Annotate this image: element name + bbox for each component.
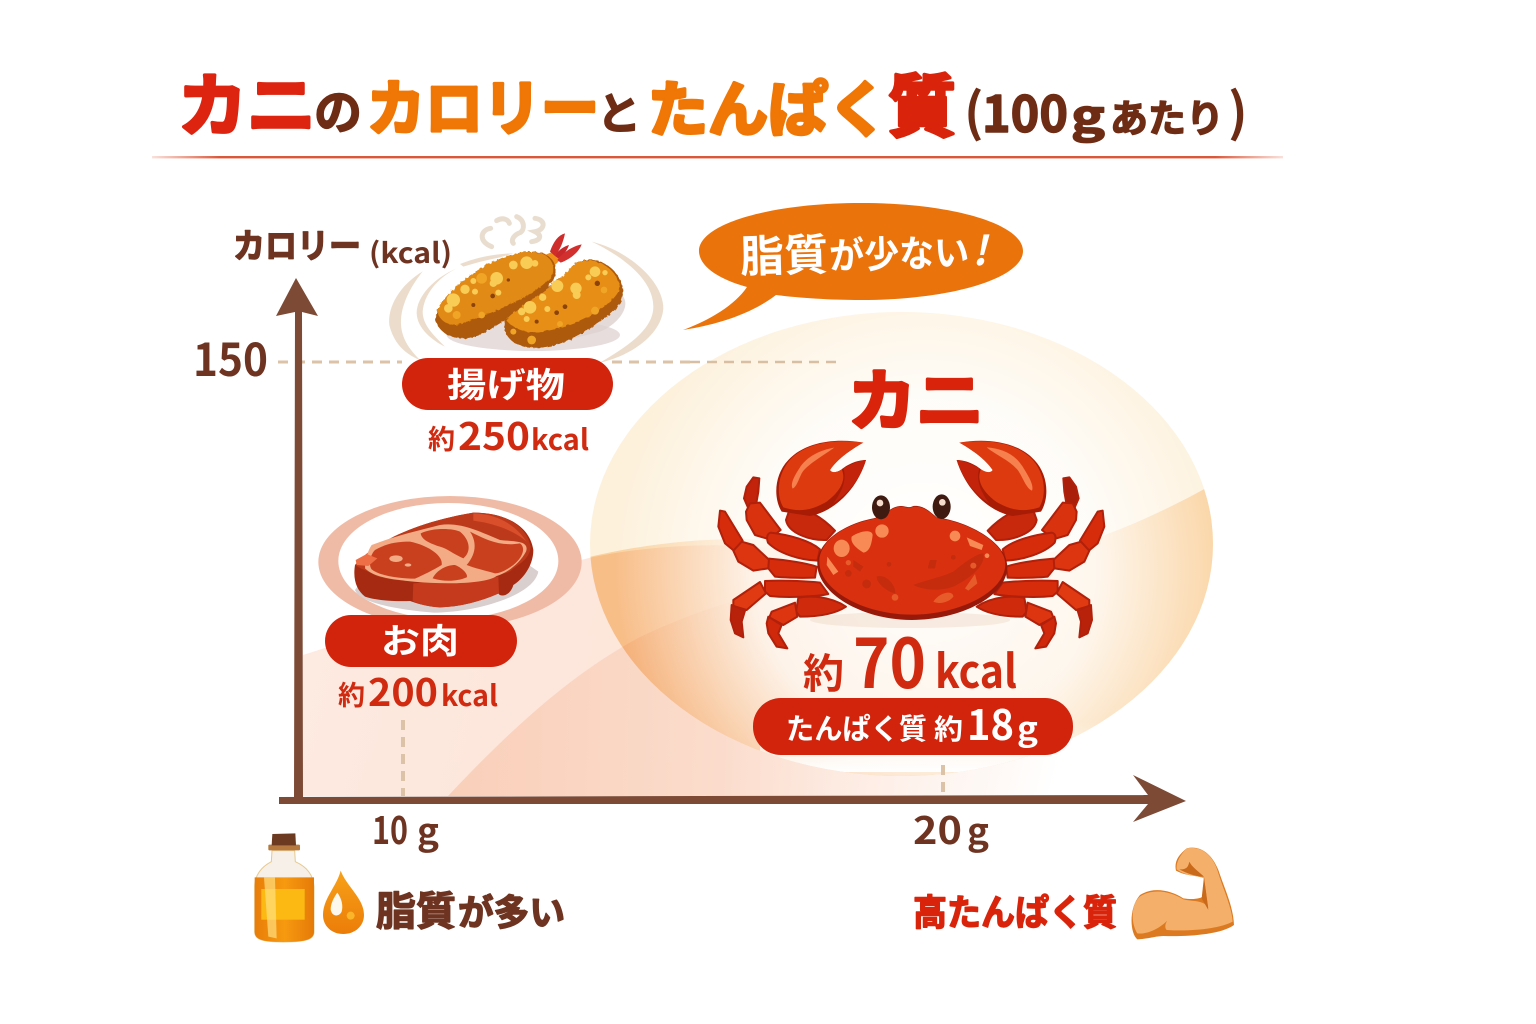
x tick 10g — [372, 800, 439, 855]
label: meat: お肉 — [381, 614, 459, 663]
icon: steak plate — [318, 496, 582, 628]
title: 質 — [888, 52, 956, 151]
title: あたり — [1110, 88, 1224, 143]
x tick 20g: g — [967, 803, 989, 855]
left legs and claw — [718, 477, 846, 648]
speech bubble: ! — [971, 219, 991, 277]
speech bubble: が少ない — [828, 222, 970, 280]
label: high fat: 脂質 — [376, 879, 456, 937]
background watercolor washes — [303, 312, 1220, 800]
right legs and claw (mirror) — [957, 441, 1104, 648]
crab eyes — [872, 495, 890, 519]
icon: flexed arm — [1132, 848, 1234, 939]
icon: oil drop — [323, 871, 364, 934]
x tick 10g: g — [417, 803, 439, 855]
y tick 150: 150 — [193, 324, 268, 389]
value: crab kcal: kcal — [935, 636, 1017, 702]
crumbs — [444, 256, 608, 322]
label: high protein: 高たんぱく質 — [913, 884, 1117, 936]
guide lines: dashed — [278, 362, 943, 796]
pill: crab protein: たんぱく質 — [786, 706, 927, 748]
pill: crab protein: 18 — [967, 692, 1014, 753]
lean patches — [370, 529, 523, 581]
speech bubble: 脂質 — [739, 219, 829, 285]
y axis title: (kcal) — [369, 232, 452, 272]
label: fried food — [402, 358, 613, 410]
title: カロリー — [367, 61, 599, 148]
title: たんぱく — [648, 62, 888, 149]
value: crab kcal: 70 — [853, 609, 926, 708]
value: fried food kcal: 約 — [428, 418, 455, 457]
y axis title: カロリー — [233, 219, 361, 268]
icon: crab — [718, 441, 1104, 648]
title: ) — [1228, 71, 1248, 146]
title: カニ — [178, 51, 316, 150]
pill: crab protein — [753, 692, 1073, 755]
icon: fried shrimp plate — [389, 217, 663, 363]
title: 100 — [982, 75, 1068, 147]
value: meat kcal: 200 — [368, 662, 438, 717]
fat marbling — [365, 524, 527, 583]
x tick 20g — [913, 800, 989, 855]
y axis title — [233, 219, 452, 272]
label: high fat — [376, 879, 565, 937]
pill: crab protein: g — [1017, 704, 1038, 750]
value: fried food kcal: 250 — [458, 406, 530, 461]
icon: oil bottle — [255, 833, 314, 942]
value: fried food kcal: kcal — [531, 417, 589, 459]
value: crab kcal — [803, 609, 1017, 708]
pill: crab protein: 約 — [934, 708, 963, 748]
title: ( — [964, 71, 984, 146]
title: と — [597, 78, 641, 142]
value: meat kcal: 約 — [338, 674, 365, 713]
title: g — [1071, 81, 1105, 145]
label: meat — [325, 614, 517, 667]
label: fried food: 揚げ物 — [447, 358, 565, 407]
x tick 20g: 20 — [913, 800, 962, 855]
steam puffs — [482, 217, 543, 247]
crab shell spots — [827, 524, 989, 575]
title: の — [314, 73, 362, 143]
value: meat kcal: kcal — [441, 673, 498, 715]
x axis arrow — [279, 775, 1186, 822]
label: high fat: が多い — [458, 884, 565, 936]
value: meat kcal — [338, 662, 498, 717]
value: crab kcal: 約 — [803, 640, 844, 700]
heading: crab: カニ — [848, 348, 984, 444]
x tick 10g: 10 — [372, 800, 408, 855]
crab body — [817, 506, 1007, 620]
value: fried food kcal — [428, 406, 589, 461]
title — [178, 51, 1248, 151]
speech bubble — [683, 203, 1023, 330]
y axis arrow — [276, 278, 318, 800]
